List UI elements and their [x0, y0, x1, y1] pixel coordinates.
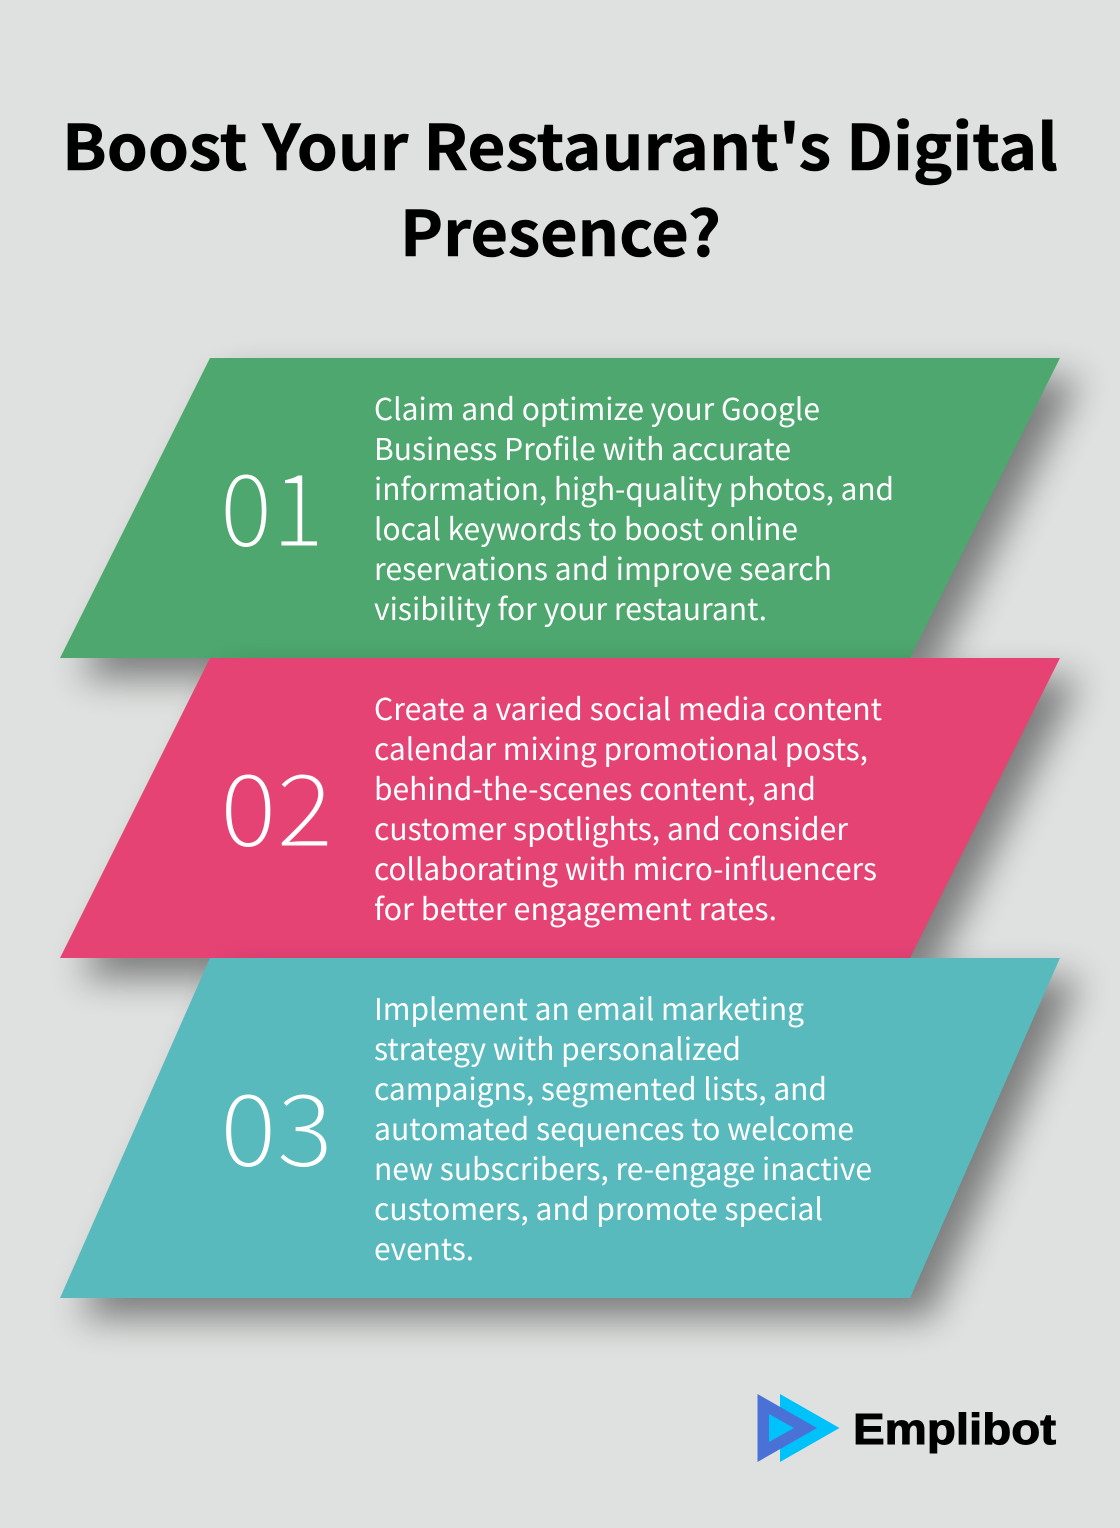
step 01 text [374, 385, 894, 629]
step 02 text: collaborating with micro-influencers [374, 845, 877, 889]
step 03 text: events. [374, 1225, 474, 1269]
step 01 text: visibility for your restaurant. [374, 585, 767, 629]
step 03 text: Implement an email marketing [374, 985, 804, 1029]
step 03 text: campaigns, segmented lists, and [374, 1065, 827, 1109]
panel: step 02 [60, 658, 1060, 958]
panel: step 01 [60, 358, 1060, 658]
step 02 text: customer spotlights, and consider [374, 805, 848, 849]
step 03 text [374, 985, 872, 1269]
step 01 text: Business Profile with accurate [374, 425, 791, 469]
pink parallelogram [60, 658, 1060, 958]
step 02 text: for better engagement rates. [374, 885, 777, 929]
step 03 text: new subscribers, re-engage inactive [374, 1145, 872, 1189]
number 03: 03 [220, 1050, 333, 1195]
step 01 text: local keywords to boost online [374, 505, 798, 549]
step 03 text: customers, and promote special [374, 1185, 823, 1229]
step 03 text: automated sequences to welcome [374, 1105, 854, 1149]
step 03 text: strategy with personalized [374, 1025, 741, 1069]
step 02 text [374, 685, 882, 929]
step 02 text: Create a varied social media content [374, 685, 882, 729]
step 02 text: behind-the-scenes content, and [374, 765, 816, 809]
step 01 text: reservations and improve search [374, 545, 832, 589]
number 01: 01 [220, 430, 324, 575]
title: Boost Your Restaurant's Digital [62, 98, 1058, 189]
panel: step 03 [60, 958, 1060, 1298]
wordmark: Emplibot [853, 1405, 1056, 1454]
title: Presence? [400, 184, 721, 275]
logo: Emplibot [758, 1394, 1056, 1462]
green parallelogram [60, 358, 1060, 658]
step 01 text: Claim and optimize your Google [374, 385, 820, 429]
title [62, 98, 1058, 275]
teal parallelogram [60, 958, 1060, 1298]
icon: play triangles [758, 1394, 840, 1462]
number 02: 02 [220, 730, 333, 875]
step 01 text: information, high-quality photos, and [374, 465, 894, 509]
step 02 text: calendar mixing promotional posts, [374, 725, 868, 769]
